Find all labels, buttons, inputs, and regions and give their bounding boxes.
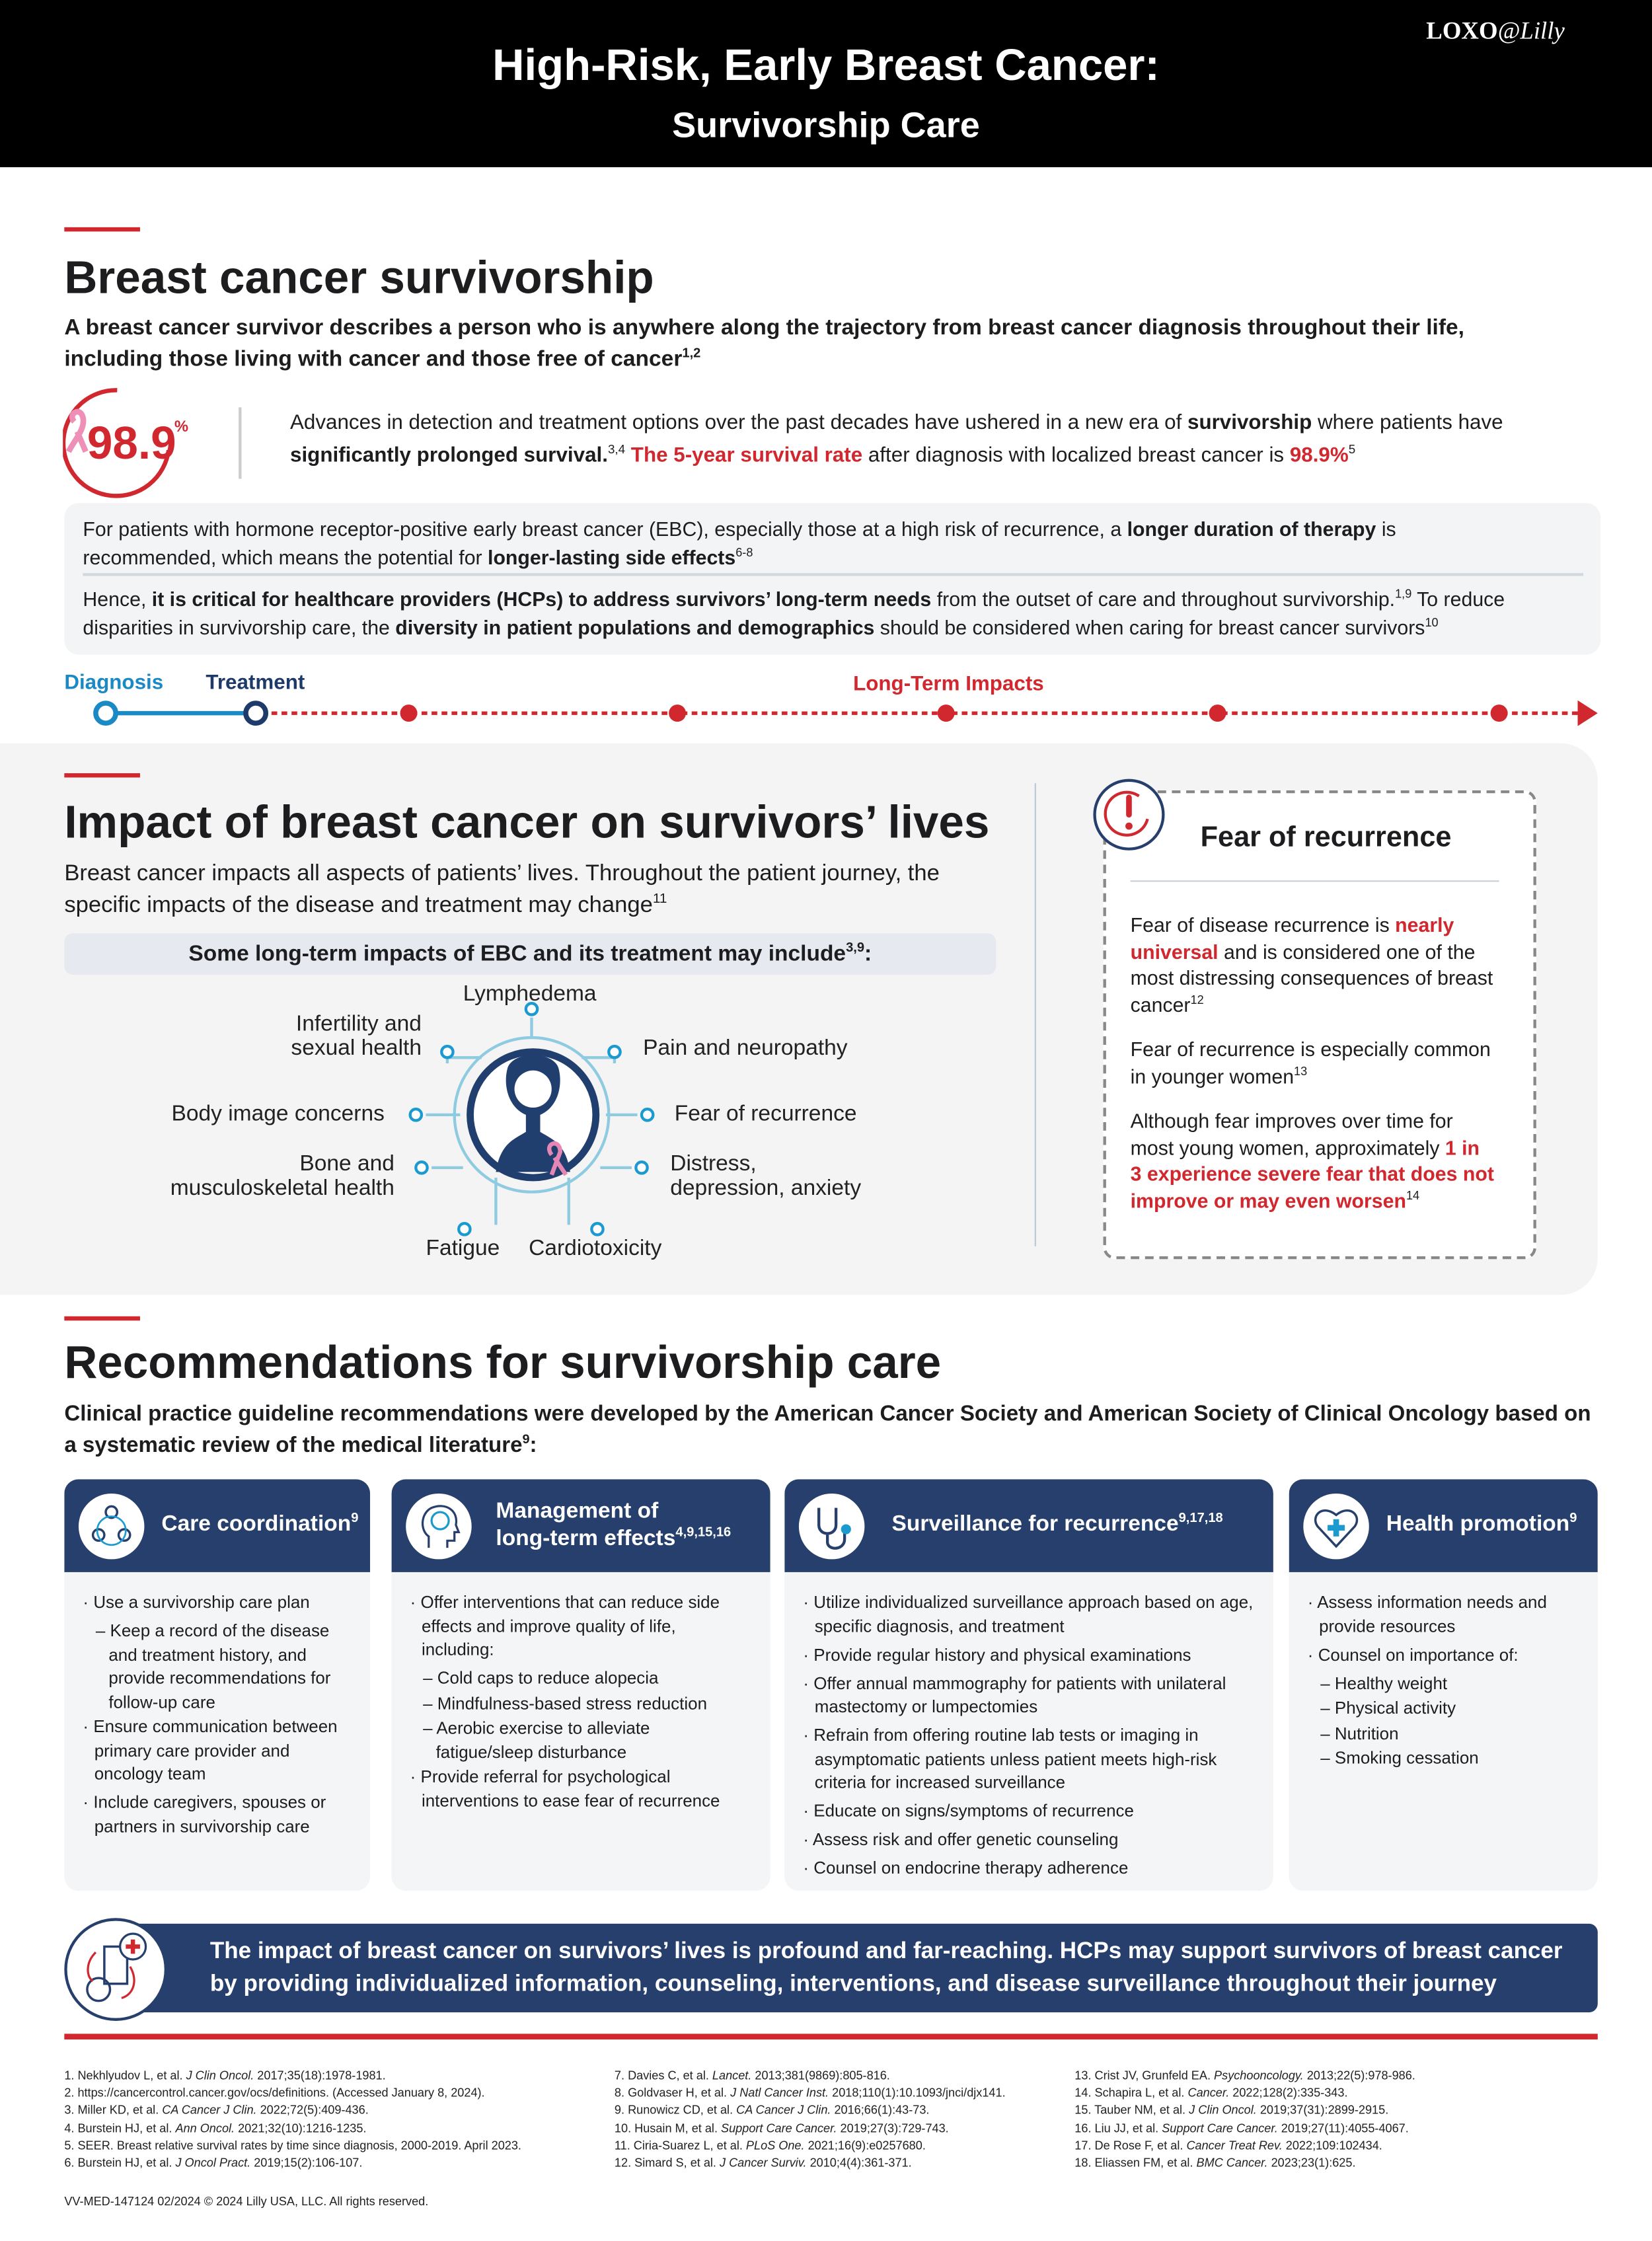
card: health promotion: Counsel on importance of: — [1318, 1644, 1519, 1664]
stat: 98.9%: % — [174, 418, 188, 436]
card: health promotion: – Healthy weight — [1320, 1673, 1447, 1693]
fear text: Fear of disease recurrence is nearly universal and is considered one of the most distressing consequences of breast cancer12 Fear of recurrence is especially common in younger women13 Although fear improves over time for most young women, approximately 1 in 3 experience severe fear that does not improve or may even worsen14 — [1131, 913, 1494, 1211]
card: surveillance: Surveillance for recurrence9,17,18 — [891, 1511, 1223, 1537]
card: care coordination: Care coordination9 — [161, 1511, 358, 1537]
logo: LOXO@Lilly — [1426, 17, 1565, 44]
card: health promotion — [1289, 1479, 1598, 1891]
diagram: impacts: Pain and neuropathy — [643, 1036, 848, 1061]
panel: fear of recurrence — [1104, 790, 1536, 1259]
references: 3. Miller KD, et al. CA Cancer J Clin. 2022;72(5):409-436. — [64, 2103, 369, 2117]
references: 5. SEER. Breast relative survival rates by time since diagnosis, 2000-2019. April 2023. — [64, 2138, 521, 2152]
diagram: impacts: Fatigue — [426, 1236, 500, 1260]
references: 15. Tauber NM, et al. J Clin Oncol. 2019;37(31):2899-2915. — [1074, 2103, 1388, 2117]
references: 12. Simard S, et al. J Cancer Surviv. 2010;4(4):361-371. — [615, 2155, 912, 2170]
card: surveillance: Provide regular history and physical examinations — [813, 1644, 1191, 1664]
references: 2. https://cancercontrol.cancer.gov/ocs/definitions. (Accessed January 8, 2024). — [64, 2086, 485, 2100]
references: 10. Husain M, et al. Support Care Cancer. 2019;27(3):729-743. — [615, 2120, 949, 2135]
recommendations intro: Clinical practice guideline recommendations were developed by the American Cancer Society and American Society of Clinical Oncology based on a systematic review of the medical literature9: — [64, 1402, 1591, 1458]
references: 11. Ciria-Suarez L, et al. PLoS One. 2021;16(9):e0257680. — [615, 2138, 926, 2152]
banner: conclusion — [64, 1918, 1598, 2021]
card: surveillance: Offer annual mammography for patients with unilateral mastectomy or lumpectomies — [813, 1673, 1226, 1716]
card: surveillance: Counsel on endocrine therapy adherence — [813, 1858, 1128, 1878]
references: 13. Crist JV, Grunfeld EA. Psychooncology. 2013;22(5):978-986. — [1074, 2068, 1415, 2082]
card: care coordination: Use a survivorship care plan — [93, 1592, 310, 1612]
card: surveillance: Utilize individualized surveillance approach based on age, specific diagnosis, and treatment — [813, 1592, 1253, 1636]
card: care coordination: Ensure communication between primary care provider and oncology team — [93, 1716, 338, 1784]
card: management of long-term effects: Offer interventions that can reduce side effects and improve quality of life, including: — [421, 1592, 720, 1659]
heading: impact: Impact of breast cancer on survivors’ lives — [64, 796, 989, 847]
card: management of long-term effects: – Mindfulness-based stress reduction — [423, 1693, 707, 1713]
diagram: impacts — [170, 982, 861, 1260]
card: care coordination: – Keep a record of the disease and treatment history, and provide recommendations for follow-up care — [96, 1620, 330, 1712]
references: 6. Burstein HJ, et al. J Oncol Pract. 2019;15(2):106-107. — [64, 2155, 362, 2170]
diagram: impacts: Body image concerns — [172, 1102, 385, 1126]
references — [64, 2068, 1415, 2170]
card: management of long-term effects — [392, 1479, 770, 1891]
diagram: impacts: Infertility and sexual health — [291, 1012, 422, 1061]
card: management of long-term effects: – Aerobic exercise to alleviate fatigue/sleep disturbance — [423, 1718, 650, 1761]
stat: 98.9% — [63, 388, 188, 498]
card: health promotion: – Nutrition — [1320, 1723, 1399, 1743]
gray info box: For patients with hormone receptor-positive early breast cancer (EBC), especially those at a high risk of recurrence, a longer duration of therapy is recommended, which means the potential for longer-lasting side effects6-8 — [83, 517, 1396, 569]
references: 1. Nekhlyudov L, et al. J Clin Oncol. 2017;35(18):1978-1981. — [64, 2068, 386, 2082]
card: health promotion: – Smoking cessation — [1320, 1748, 1479, 1768]
icon: alarm — [1093, 779, 1165, 851]
intro text: A breast cancer survivor describes a person who is anywhere along the trajectory from breast cancer diagnosis throughout their life, including those living with cancer and those free of cancer1,2 — [64, 316, 1464, 371]
card: surveillance: Assess risk and offer genetic counseling — [813, 1829, 1118, 1849]
icon: care clipboard — [64, 1918, 167, 2021]
card: management of long-term effects: long-term effects4,9,15,16 — [496, 1525, 731, 1550]
title — [492, 40, 1160, 146]
references: 17. De Rose F, et al. Cancer Treat Rev. 2022;109:102434. — [1074, 2138, 1382, 2152]
impact text: Breast cancer impacts all aspects of patients’ lives. Throughout the patient journey, the specific impacts of the disease and treatment may change11 — [64, 862, 940, 917]
card: management of long-term effects: Management of — [496, 1500, 658, 1523]
timeline: Diagnosis — [64, 671, 163, 695]
diagram: impacts: Distress, — [670, 1152, 757, 1176]
card: management of long-term effects: – Cold caps to reduce alopecia — [423, 1668, 658, 1688]
diagram: impacts: Fear of recurrence — [675, 1102, 856, 1126]
gray info box: Hence, it is critical for healthcare providers (HCPs) to address survivors’ long-term needs from the outset of care and throughout survivorship.1,9 To reduce disparities in survivorship care, the diversity in patient populations and demographics should be considered when caring for breast cancer survivors10 — [83, 586, 1505, 639]
gray info box — [64, 503, 1600, 654]
timeline: Treatment — [206, 671, 305, 695]
diagram: impacts: Lymphedema — [463, 982, 597, 1006]
card: care coordination — [64, 1479, 370, 1891]
references: 16. Liu JJ, et al. Support Care Cancer. 2019;27(11):4055-4067. — [1074, 2120, 1409, 2135]
card: health promotion: Assess information needs and provide resources — [1317, 1592, 1547, 1636]
title: Survivorship Care — [672, 106, 980, 146]
footer: VV-MED-147124 02/2024 © 2024 Lilly USA, LLC. All rights reserved. — [64, 2194, 428, 2208]
references: 8. Goldvaser H, et al. J Natl Cancer Inst. 2018;110(1):10.1093/jnci/djx141. — [615, 2086, 1006, 2100]
banner text: The impact of breast cancer on survivors’ lives is profound and far-reaching. HCPs may support survivors of breast cancer by providing individualized information, counseling, interventions, and disease surveillance throughout their journey — [210, 1938, 1563, 1996]
header bar — [0, 0, 1652, 167]
card: management of long-term effects: Provide referral for psychological interventions to ease fear of recurrence — [421, 1766, 720, 1810]
references: 18. Eliassen FM, et al. BMC Cancer. 2023;23(1):625. — [1074, 2155, 1355, 2170]
references: 9. Runowicz CD, et al. CA Cancer J Clin. 2016;66(1):43-73. — [615, 2103, 929, 2117]
references: 14. Schapira L, et al. Cancer. 2022;128(2):335-343. — [1074, 2086, 1347, 2100]
stat: 98.9%: 98.9 — [87, 417, 176, 469]
heading: breast cancer survivorship: Breast cancer survivorship — [64, 252, 654, 303]
subheading box: Some long-term impacts of EBC and its treatment may include3,9: — [188, 940, 872, 966]
timeline: Long-Term Impacts — [853, 673, 1044, 696]
timeline — [64, 671, 1598, 726]
card: care coordination: Include caregivers, spouses or partners in survivorship care — [93, 1792, 326, 1836]
diagram: impacts: Cardiotoxicity — [529, 1236, 661, 1260]
diagram: impacts: Bone and musculoskeletal health — [170, 1152, 394, 1201]
card: surveillance: Refrain from offering routine lab tests or imaging in asymptomatic patients unless patient meets high-risk criteria for increased surveillance — [813, 1725, 1217, 1792]
card: surveillance: Educate on signs/symptoms of recurrence — [813, 1801, 1134, 1821]
card: surveillance — [784, 1479, 1273, 1891]
title: High-Risk, Early Breast Cancer: — [492, 40, 1160, 90]
panel: impacts section — [0, 743, 1598, 1295]
references: 7. Davies C, et al. Lancet. 2013;381(9869):805-816. — [615, 2068, 890, 2082]
survival text: Advances in detection and treatment options over the past decades have ushered in a new era of survivorship where patients have significantly prolonged survival.3,4 The 5-year survival rate after diagnosis with localized breast cancer is 98.9%5 — [290, 412, 1503, 467]
heading: recommendations: Recommendations for survivorship care — [64, 1336, 941, 1388]
card: health promotion: Health promotion9 — [1386, 1511, 1577, 1537]
subheading box — [64, 933, 996, 975]
fear heading: Fear of recurrence — [1201, 822, 1451, 853]
card: health promotion: – Physical activity — [1320, 1698, 1456, 1718]
diagram: impacts: depression, anxiety — [670, 1176, 861, 1201]
references: 4. Burstein HJ, et al. Ann Oncol. 2021;32(10):1216-1235. — [64, 2120, 366, 2135]
